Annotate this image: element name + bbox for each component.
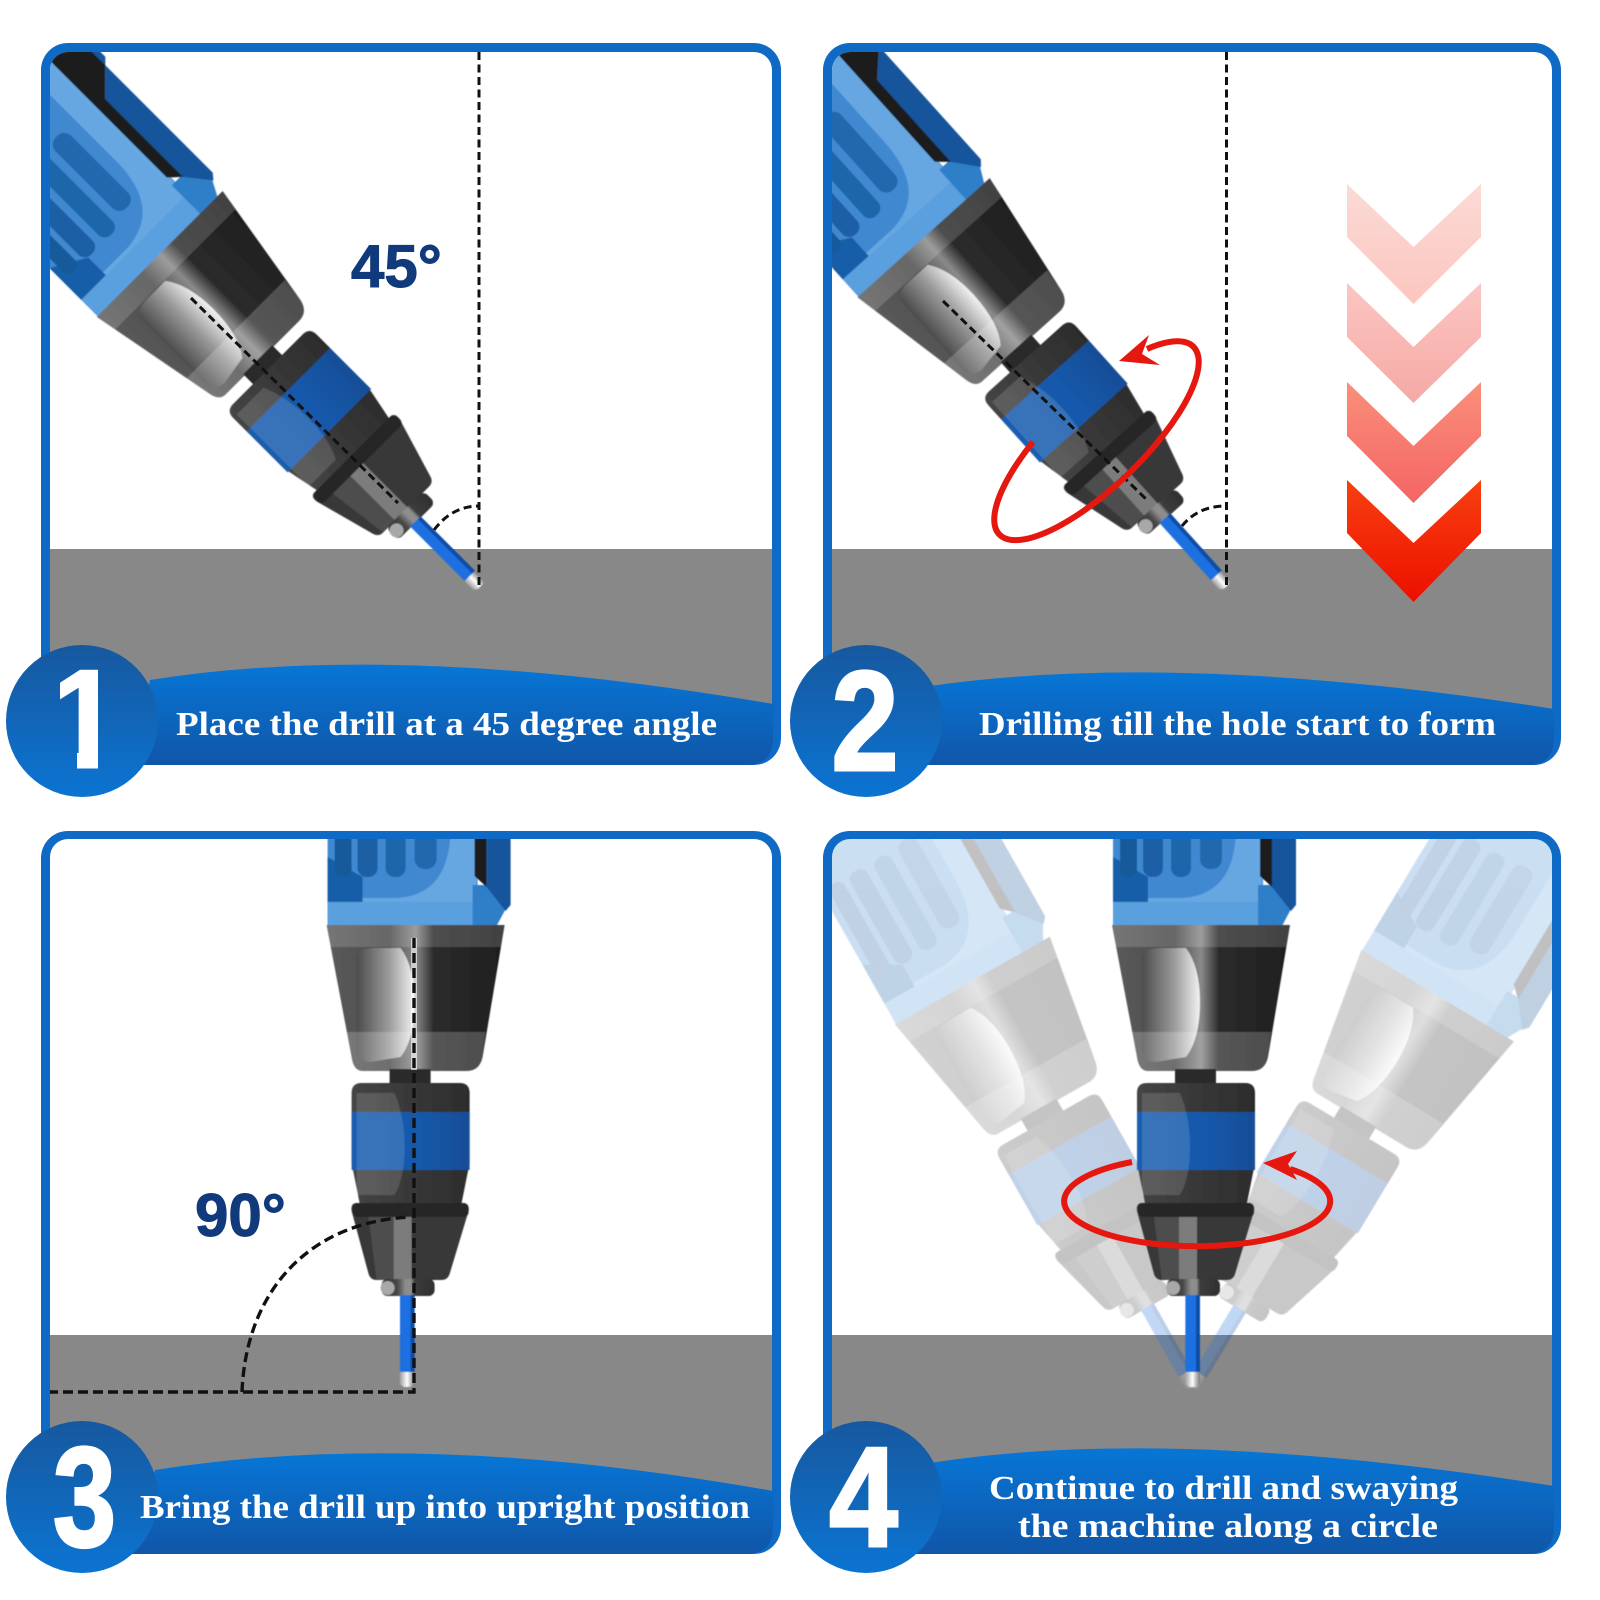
caption band — [910, 1448, 1554, 1554]
caption band — [130, 1453, 773, 1554]
dashed angle guides — [943, 52, 1226, 587]
number badge: 4 — [829, 1419, 898, 1577]
caption: Drilling till the hole start to form — [979, 706, 1496, 743]
angle label: 45° — [351, 233, 442, 300]
dashed angle guides — [50, 938, 414, 1392]
caption band — [130, 665, 773, 765]
swaying drills — [832, 839, 1552, 1389]
panel 1: place the drill at 45 degrees — [0, 0, 781, 799]
caption: Continue to drill and swaying — [989, 1470, 1458, 1507]
rotation arrow — [994, 335, 1199, 540]
panel 3: bring the drill upright — [6, 831, 781, 1573]
number badge: 1 — [46, 640, 125, 799]
number badge: 3 — [53, 1419, 116, 1577]
upright drill — [326, 839, 512, 1388]
caption band — [910, 672, 1554, 765]
caption: Bring the drill up into upright position — [140, 1489, 750, 1526]
caption: Place the drill at a 45 degree angle — [176, 706, 717, 743]
panel 4: continue drilling and swaying along a circle — [790, 831, 1561, 1573]
angle label: 90° — [195, 1182, 286, 1249]
panel 2: drilling till the hole starts to form — [790, 43, 1561, 797]
dashed angle guides — [191, 52, 479, 587]
number badge — [790, 642, 942, 800]
drill at angle — [832, 52, 1230, 590]
number badge — [790, 1419, 942, 1577]
downward pressure chevrons — [1347, 184, 1481, 602]
number badge — [6, 1419, 158, 1577]
caption line 2: the machine along a circle — [1018, 1508, 1438, 1545]
number badge — [6, 640, 158, 799]
rotation arrow — [1064, 1151, 1330, 1246]
drill at 45 degree angle — [50, 52, 484, 590]
number badge: 2 — [831, 642, 899, 800]
